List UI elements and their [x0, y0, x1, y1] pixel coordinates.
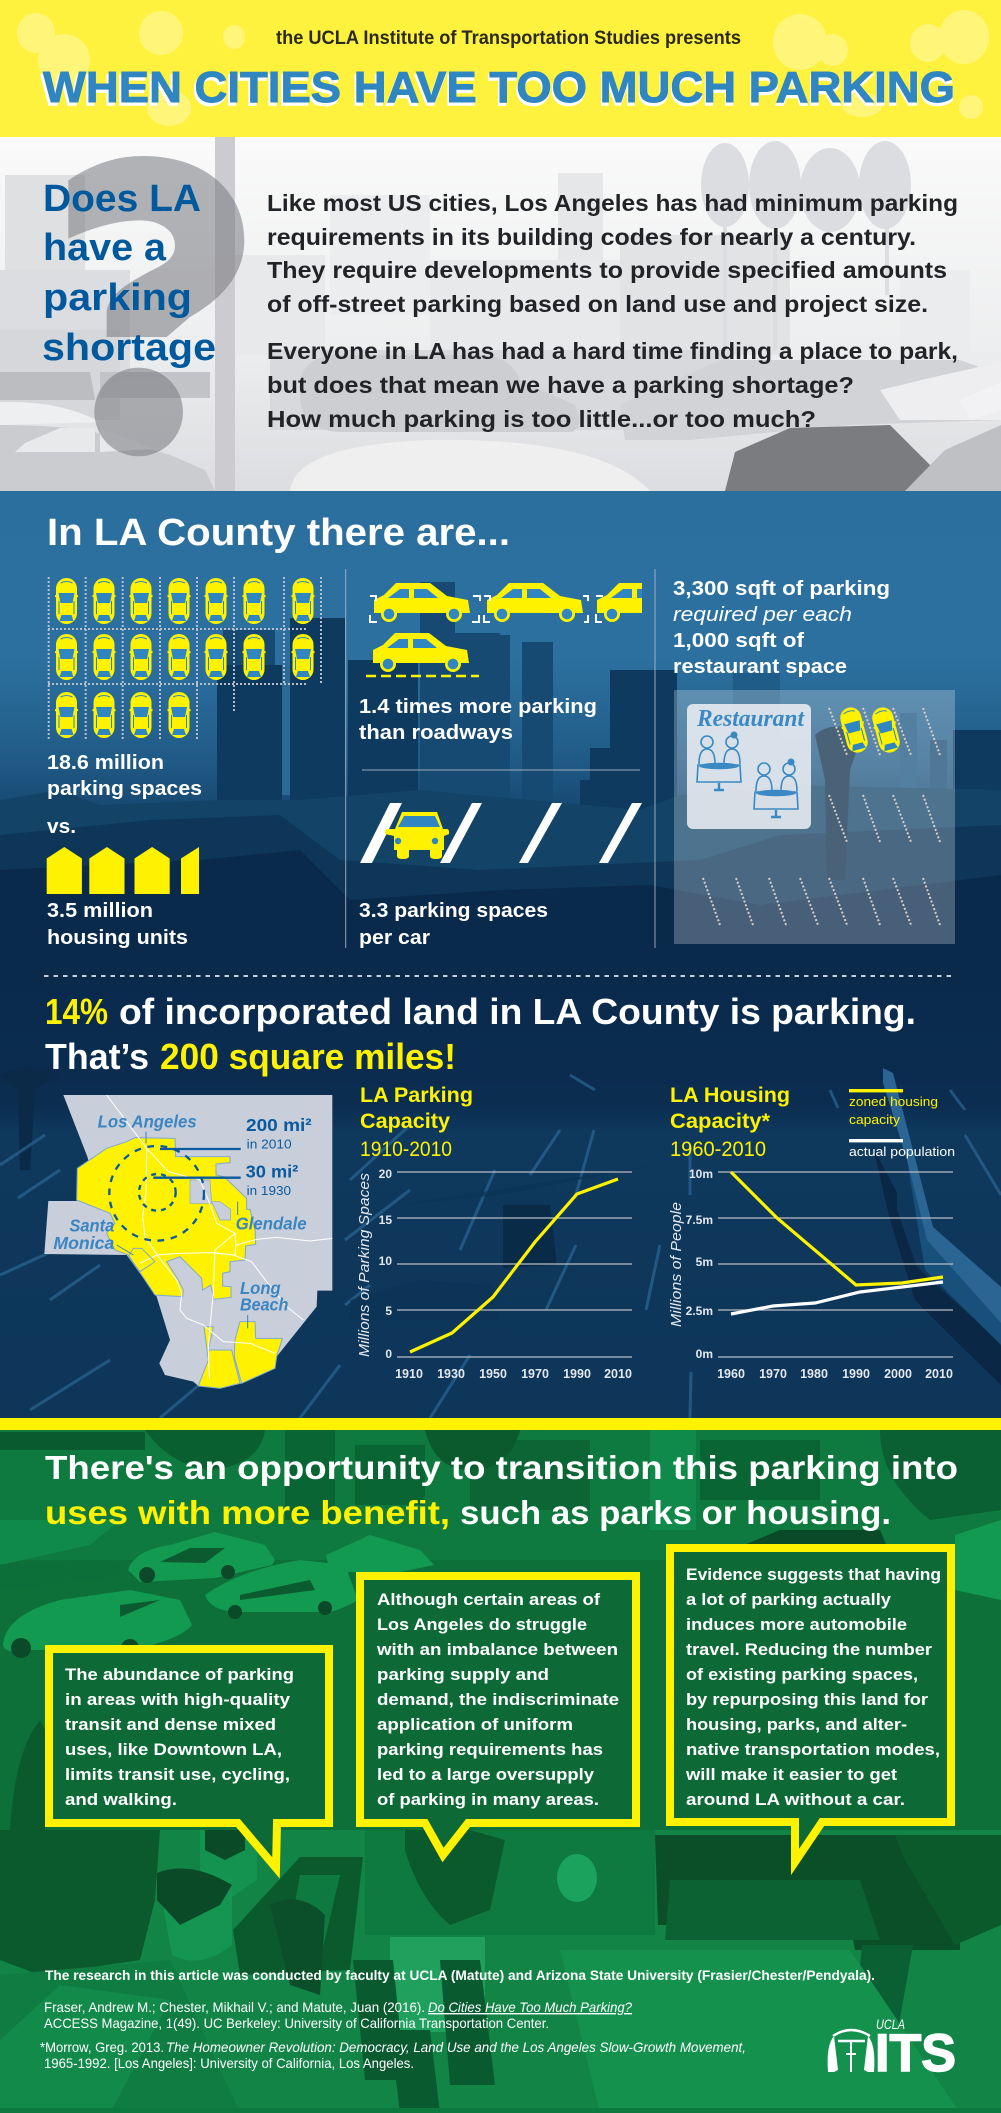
heading: 14 percent of land [45, 991, 916, 1077]
text block: references: ACCESS Magazine, 1(49). UC Berkeley: University of California Transportation Center. [44, 2015, 549, 2031]
text block: intro: of off-street parking based on land use and project size. [267, 291, 928, 317]
icon: restaurant card [687, 704, 811, 829]
text block: intro: requirements in its building codes for nearly a century. [267, 224, 916, 250]
text block: intro: but does that mean we have a parking shortage? [267, 372, 854, 398]
stat: restaurant parking: 1,000 sqft of [673, 630, 804, 652]
text block: references: The research in this article was conducted by faculty at UCLA (Matute) and Arizona State University (Frasier/Chester/Pendyala). [45, 1967, 875, 1983]
icon: cars parked on street [369, 583, 642, 623]
stat: parking vs roadways [359, 696, 597, 744]
text block: intro: Like most US cities, Los Angeles has had minimum parking [267, 190, 958, 216]
heading: does LA have a parking shortage: shortage [42, 327, 216, 369]
callout: abundance of parking: in areas with high-quality [65, 1690, 291, 1709]
callout: induced travel: induces more automobile [686, 1615, 907, 1634]
map: LA county parking footprint: 30 mi² [246, 1161, 298, 1181]
callout: imbalance: parking supply and [377, 1665, 549, 1684]
text block: references: Fraser, Andrew M.; Chester, Mikhail V.; and Matute, Juan (2016). [44, 1999, 425, 2015]
panel: restaurant footprint diagram [674, 690, 955, 944]
line chart: parking capacity: 1970 [521, 1367, 549, 1381]
stat: spaces per car: 3.3 parking spaces [359, 900, 548, 922]
line chart: parking capacity: 2010 [604, 1367, 632, 1381]
callout: induced travel: by repurposing this land for [686, 1690, 928, 1709]
text block: references: *Morrow, Greg. 2013. [40, 2039, 164, 2055]
heading: does LA have a parking shortage: Does LA [43, 178, 201, 220]
chart heading: LA parking capacity: 1910-2010 [360, 1138, 452, 1161]
text block: references [40, 1967, 875, 2071]
line chart: housing capacity: 2.5m [686, 1304, 713, 1318]
callout: imbalance [360, 1576, 636, 1855]
heading: opportunity: uses with more benefit, [45, 1494, 450, 1531]
heading: does LA have a parking shortage: parking [43, 277, 192, 319]
text block: intro: They require developments to provide specified amounts [267, 257, 947, 283]
map: LA county parking footprint: Glendale [236, 1213, 307, 1233]
callout: imbalance: parking requirements has [377, 1740, 603, 1759]
map: LA county parking footprint: Santa [69, 1216, 114, 1236]
map: LA county parking footprint: in 2010 [247, 1136, 292, 1151]
stat: restaurant parking: 3,300 sqft of parking [673, 578, 890, 600]
stat: parking spaces [47, 752, 202, 838]
map: LA county parking footprint: Monica [53, 1233, 114, 1253]
callout: imbalance: led to a large oversupply [377, 1765, 595, 1784]
text block: references: 1965-1992. [Los Angeles]: University of California, Los Angeles. [44, 2055, 414, 2071]
panel: intro photo background [0, 137, 1001, 491]
map: LA county parking footprint: Beach [240, 1295, 288, 1315]
line chart: housing capacity: 1970 [759, 1367, 787, 1381]
callout: abundance of parking: limits transit use, cycling, [65, 1765, 290, 1784]
callout: induced travel: Evidence suggests that having [686, 1565, 941, 1584]
line chart: parking capacity: 20 [379, 1167, 392, 1181]
chart heading: LA parking capacity: Capacity [360, 1110, 450, 1133]
map: LA county parking footprint: Los Angeles [98, 1112, 197, 1132]
stat: spaces per car: per car [359, 927, 430, 949]
icon: large question mark [68, 156, 244, 456]
callout: imbalance: application of uniform [377, 1715, 573, 1734]
logo: UCLA ITS: UCLA [876, 2016, 905, 2032]
map: LA county parking footprint: 200 mi² [246, 1115, 312, 1135]
legend: actual population [849, 1144, 955, 1159]
header band [0, 0, 1001, 137]
title: WHEN CITIES HAVE TOO MUCH PARKING [41, 66, 955, 115]
heading: 14 percent of land: That’s [45, 1036, 149, 1077]
callout: imbalance: Although certain areas of [377, 1590, 600, 1609]
callout: imbalance: with an imbalance between [376, 1640, 618, 1659]
line chart: housing capacity: 2000 [884, 1367, 912, 1381]
callout: abundance of parking: The abundance of parking [65, 1665, 294, 1684]
line chart: parking capacity [356, 1167, 632, 1381]
stat: parking spaces: 18.6 million [47, 752, 164, 774]
callout: abundance of parking [49, 1649, 329, 1868]
callout: induced travel: housing, parks, and alter- [686, 1715, 907, 1734]
chart heading: LA housing capacity: Capacity* [670, 1110, 771, 1133]
chart heading: LA parking capacity: LA Parking [360, 1084, 473, 1107]
heading: opportunity [45, 1449, 958, 1531]
logo: UCLA ITS [828, 2016, 956, 2083]
line chart: housing capacity: 7.5m [686, 1213, 713, 1227]
chart heading: LA housing capacity: LA Housing [670, 1084, 790, 1107]
line chart: parking capacity: 1930 [437, 1367, 465, 1381]
icon row: houses [47, 847, 199, 894]
panel: green plaza photo background [0, 1418, 1001, 2113]
stat: parking vs roadways: than roadways [359, 722, 513, 744]
line chart: parking capacity: 5 [385, 1304, 392, 1318]
chart heading: LA housing capacity [670, 1084, 790, 1161]
callout: induced travel: native transportation modes, [686, 1740, 940, 1759]
callout: imbalance: demand, the indiscriminate [377, 1690, 619, 1709]
heading: 14 percent of land: 14% [45, 991, 108, 1032]
heading: 14 percent of land: 200 square miles! [160, 1036, 456, 1077]
line chart: housing capacity: 1960 [717, 1367, 745, 1381]
icon: car on road [366, 633, 479, 676]
heading: does LA have a parking shortage: have a [43, 227, 167, 269]
panel: parking lot background [0, 970, 1001, 1418]
stat: parking spaces: parking spaces [47, 778, 202, 800]
heading: does LA have a parking shortage [42, 178, 216, 369]
title: WHEN CITIES HAVE TOO MUCH PARKING [43, 63, 955, 112]
stat: housing units: housing units [47, 927, 188, 949]
line chart: housing capacity [668, 1167, 953, 1381]
legend: capacity [849, 1112, 901, 1127]
heading: In LA County there are: In LA County there are... [47, 512, 510, 554]
callout: induced travel [670, 1548, 951, 1862]
callout: induced travel: a lot of parking actually [686, 1590, 892, 1609]
callout: abundance of parking: uses, like Downtown LA, [65, 1740, 282, 1759]
text block: intro [267, 190, 958, 432]
line chart: housing capacity: 1990 [842, 1367, 870, 1381]
logo: UCLA ITS: ITS [875, 2024, 956, 2083]
text block: intro: Everyone in LA has had a hard time finding a place to park, [267, 338, 958, 364]
callout: induced travel: travel. Reducing the number [686, 1640, 932, 1659]
line chart: parking capacity: 10 [379, 1254, 392, 1268]
stat: parking vs roadways: 1.4 times more parking [359, 696, 597, 718]
icon grid: parking spaces [48, 577, 321, 739]
callout: imbalance: Los Angeles do struggle [377, 1615, 587, 1634]
stat: housing units: 3.5 million [47, 900, 153, 922]
callout: abundance of parking: transit and dense mixed [65, 1715, 276, 1734]
panel: LA County skyline background [0, 491, 1001, 971]
heading: opportunity: such as parks or housing. [460, 1494, 891, 1531]
map: LA county parking footprint: Long [240, 1278, 281, 1298]
subtitle: presents line: the UCLA Institute of Transportation Studies presents [276, 28, 741, 49]
line chart: parking capacity: Millions of Parking Spaces [356, 1172, 373, 1357]
text block: references: The Homeowner Revolution: Democracy, Land Use and the Los Angeles Slow-Growth Movement, [166, 2039, 746, 2055]
callout: induced travel: will make it easier to get [685, 1765, 897, 1784]
line chart: housing capacity: 5m [696, 1255, 713, 1269]
stat: restaurant parking [673, 578, 890, 678]
line chart: housing capacity: 0m [696, 1347, 713, 1361]
icon: restaurant card: Restaurant [696, 706, 805, 732]
heading: opportunity: There's an opportunity to transition this parking into [45, 1449, 958, 1486]
legend: zoned housing [849, 1094, 938, 1109]
line chart: parking capacity: 1950 [479, 1367, 507, 1381]
line chart: parking capacity: 1990 [563, 1367, 591, 1381]
icon: parking stripes with car [360, 803, 642, 863]
heading: 14 percent of land: of incorporated land in LA County is parking. [119, 991, 916, 1032]
text block: references: Do Cities Have Too Much Parking? [428, 1999, 632, 2015]
chart heading: LA housing capacity: 1960-2010 [670, 1138, 766, 1161]
legend [849, 1089, 955, 1159]
stat: housing units [47, 900, 188, 949]
line chart: housing capacity: 2010 [925, 1367, 953, 1381]
stat: restaurant parking: restaurant space [673, 656, 847, 678]
line chart: parking capacity: 0 [385, 1347, 392, 1361]
line chart: housing capacity: 1980 [800, 1367, 828, 1381]
callout: imbalance: of parking in many areas. [377, 1790, 599, 1809]
stat: parking spaces: vs. [47, 816, 76, 838]
map: LA county parking footprint [44, 1095, 332, 1388]
stat: spaces per car [359, 900, 548, 949]
line chart: housing capacity: Millions of People [668, 1202, 685, 1327]
callout: induced travel: around LA without a car. [686, 1790, 905, 1809]
callout: induced travel: of existing parking spaces, [686, 1665, 918, 1684]
chart heading: LA parking capacity [360, 1084, 473, 1161]
text block: intro: How much parking is too little...or too much? [267, 406, 816, 432]
line chart: housing capacity: 10m [689, 1167, 713, 1181]
line chart: parking capacity: 1910 [395, 1367, 423, 1381]
callout: abundance of parking: and walking. [65, 1790, 177, 1809]
stat: restaurant parking: required per each [673, 604, 852, 626]
map: LA county parking footprint: in 1930 [247, 1183, 291, 1198]
line chart: parking capacity: 15 [379, 1213, 392, 1227]
